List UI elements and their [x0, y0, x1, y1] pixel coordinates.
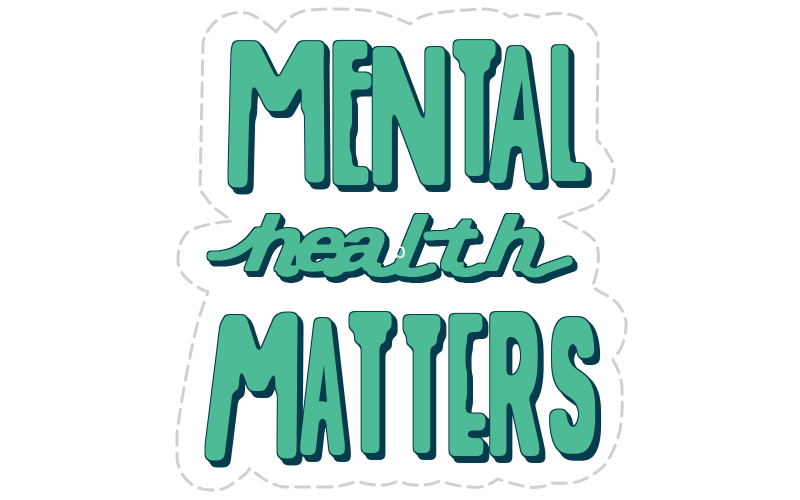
- heading word: MENTAL: M: [225, 28, 329, 125]
- heading word: MATTERS: T: [354, 275, 387, 489]
- counter of A: [319, 365, 327, 402]
- heading word: MATTERS: [204, 311, 602, 468]
- heading word: MENTAL: A: [494, 13, 538, 218]
- heading word: MATTERS: R: [490, 274, 538, 493]
- heading word: MENTAL: T: [458, 6, 491, 210]
- counter of A: [513, 80, 524, 120]
- dashed sticker outline: [177, 9, 626, 490]
- heading word: MENTAL: N: [369, 12, 449, 220]
- heading word: MENTAL: E: [336, 3, 365, 221]
- heading word: MATTERS: E: [452, 278, 480, 492]
- heading word: MENTAL: [228, 39, 592, 194]
- heading word: MATTERS: T: [408, 279, 436, 488]
- heading word: MATTERS: S: [552, 286, 593, 486]
- heading word: MATTERS: A: [305, 283, 340, 489]
- heading word: MATTERS: M: [217, 300, 300, 407]
- small white letter b: b: [394, 240, 406, 263]
- heading word: MENTAL: L: [554, 12, 582, 216]
- script word: health: health: [233, 201, 560, 286]
